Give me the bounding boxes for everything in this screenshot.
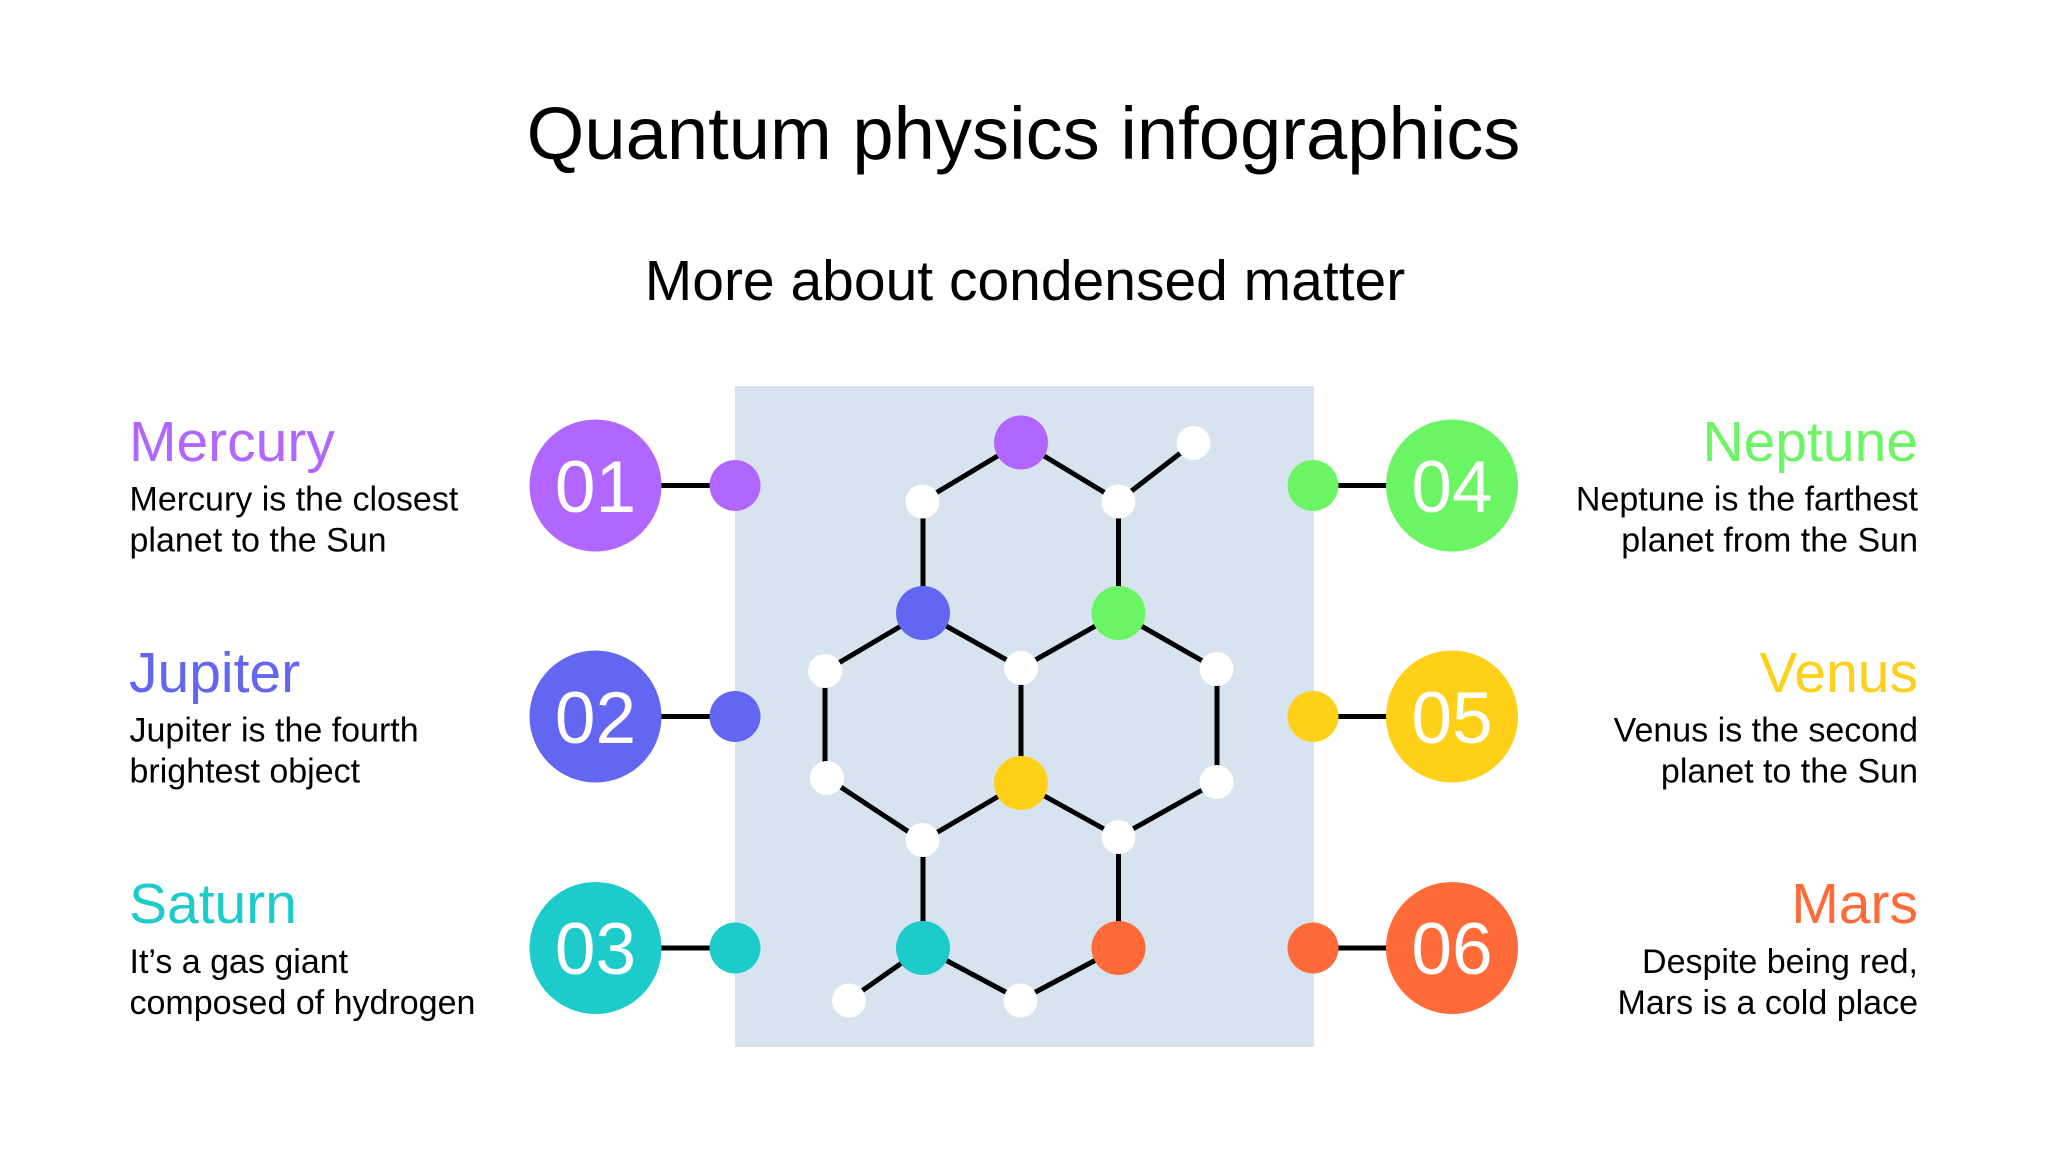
description: Mars: Despite being red, — [1642, 943, 1918, 981]
title: Quantum physics infographics — [527, 92, 1520, 175]
description: Venus: Venus is the second — [1614, 712, 1918, 750]
description: Venus: planet to the Sun — [1661, 752, 1918, 790]
lattice bonds — [825, 442, 1217, 1000]
description: Jupiter: brightest object — [130, 752, 361, 790]
connector 03 — [596, 946, 735, 950]
panel: molecule background — [735, 386, 1314, 1047]
connector 06 — [1313, 946, 1452, 950]
item 02: Jupiter — [129, 641, 760, 790]
description: Mercury: planet to the Sun — [130, 522, 387, 560]
white lattice nodes — [808, 426, 1234, 1018]
description: Mercury: Mercury is the closest — [130, 480, 459, 518]
connector dot 02 — [710, 691, 760, 742]
heading: Saturn: Saturn — [129, 872, 297, 936]
description: Saturn: It’s a gas giant — [130, 943, 349, 981]
coloured lattice nodes — [896, 416, 1146, 975]
connector dot 03 — [710, 922, 760, 974]
connector dot 01 — [710, 460, 760, 511]
subtitle: More about condensed matter — [645, 249, 1405, 313]
number 03: 03 — [555, 909, 636, 990]
item 06: Mars — [1288, 872, 1918, 1022]
connector 05 — [1313, 714, 1452, 719]
heading: Mars: Mars — [1791, 872, 1918, 936]
badge 05 — [1386, 650, 1518, 782]
heading: Venus: Venus — [1760, 641, 1918, 705]
connector dot 04 — [1288, 460, 1338, 511]
connector dot 05 — [1288, 691, 1338, 742]
badge 04 — [1386, 420, 1518, 552]
heading: Neptune: Neptune — [1702, 410, 1918, 474]
connector 01 — [596, 483, 735, 488]
description: Jupiter: Jupiter is the fourth — [130, 712, 419, 750]
heading: Mercury: Mercury — [129, 410, 335, 474]
number 01: 01 — [555, 447, 636, 528]
number 04: 04 — [1411, 447, 1493, 528]
connector dot 06 — [1288, 922, 1338, 974]
item 03: Saturn — [129, 872, 760, 1022]
description: Neptune: planet from the Sun — [1621, 522, 1918, 560]
number 06: 06 — [1411, 909, 1493, 990]
badge 06 — [1386, 882, 1518, 1014]
description: Saturn: composed of hydrogen — [130, 984, 475, 1022]
item 04: Neptune — [1288, 410, 1919, 560]
heading: Jupiter: Jupiter — [129, 641, 300, 705]
description: Mars: Mars is a cold place — [1618, 984, 1918, 1022]
item 01: Mercury — [129, 410, 760, 560]
description: Neptune: Neptune is the farthest — [1576, 480, 1919, 518]
badge 02 — [530, 650, 662, 782]
badge 01 — [530, 420, 662, 552]
number 05: 05 — [1411, 678, 1493, 759]
badge 03 — [530, 882, 662, 1014]
item 05: Venus — [1288, 641, 1918, 790]
number 02: 02 — [555, 678, 636, 759]
lattice diagram — [808, 416, 1234, 1018]
connector 02 — [596, 714, 735, 719]
connector 04 — [1313, 483, 1452, 488]
